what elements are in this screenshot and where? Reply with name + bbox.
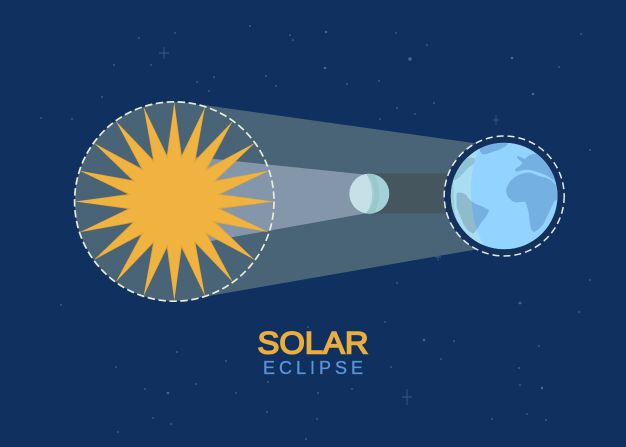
icon: sun [75, 102, 273, 300]
land in shade [453, 158, 477, 234]
sun dashed ring [75, 102, 274, 301]
penumbra beam [203, 105, 490, 297]
icon: earth [450, 142, 558, 250]
lit beam to moon [190, 156, 365, 243]
subtitle: eclipse: ECLIPSE [263, 358, 363, 378]
land [457, 143, 558, 233]
earth backing ring [444, 136, 564, 256]
dark limb [450, 178, 458, 224]
earth shaded crescent [450, 148, 484, 245]
earth dashed ring [444, 136, 564, 256]
icon: moon [349, 174, 389, 214]
umbra shadow from moon to earth [369, 174, 459, 214]
title: solar: SOLAR [258, 324, 368, 360]
sun disc backing [75, 102, 274, 301]
